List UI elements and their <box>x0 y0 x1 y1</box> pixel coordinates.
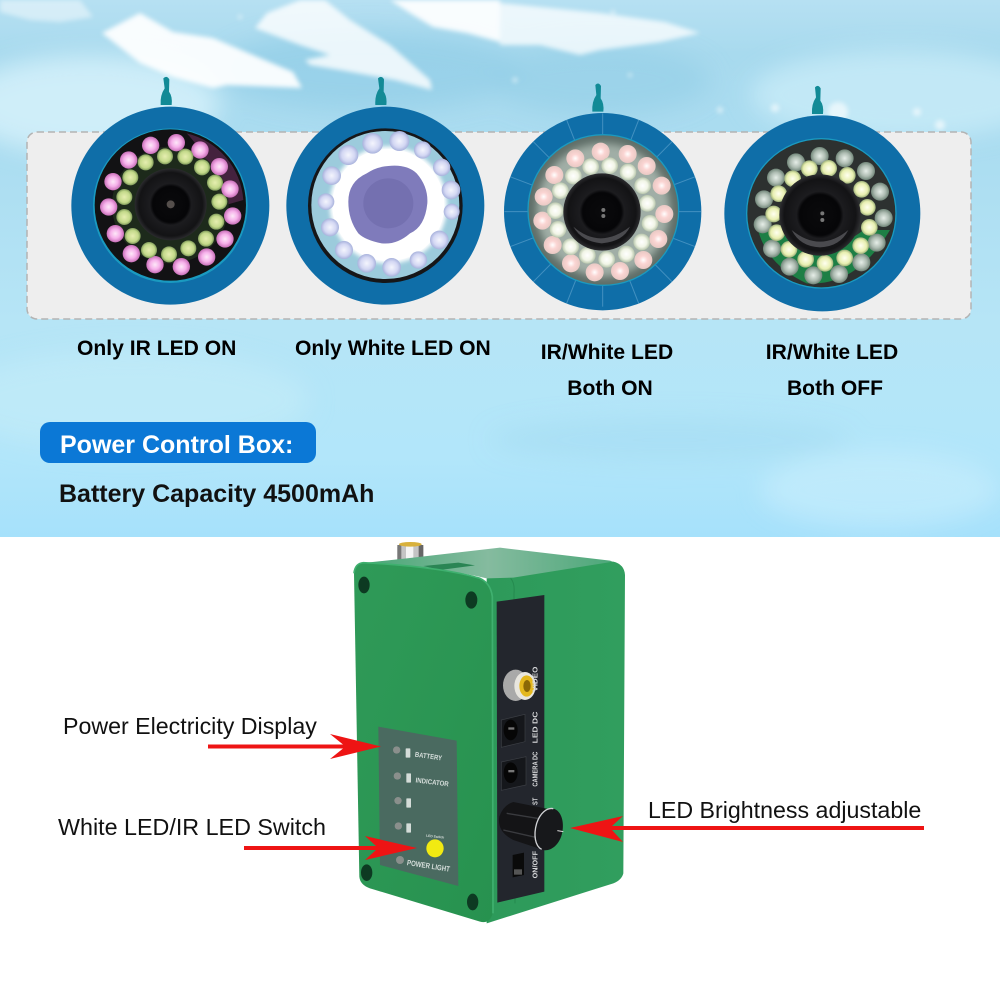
power control box product <box>354 542 625 923</box>
panel: dashed camera background <box>27 132 971 319</box>
indicator panel: POWER LIGHT <box>406 858 451 874</box>
label: both on: Both ON <box>567 377 653 400</box>
connector panel: VIDEO <box>532 666 539 692</box>
label: both off: IR/White LED <box>766 341 898 364</box>
label: only white LED on: Only White LED ON <box>295 337 491 360</box>
side face <box>487 562 625 923</box>
connector panel <box>497 595 544 903</box>
label: both off: Both OFF <box>787 377 883 400</box>
indicator panel: BATTERY <box>414 752 443 762</box>
camera: only IR LED on <box>71 77 269 305</box>
connector panel: LED DC <box>532 712 539 743</box>
connector panel: ON/OFF <box>532 850 539 878</box>
callout: power electricity display: Power Electricity Display <box>63 713 317 739</box>
callout: LED switch: White LED/IR LED Switch <box>58 814 326 840</box>
camera: both LEDs on <box>504 84 701 310</box>
indicator panel: LED Switch <box>426 834 445 840</box>
label: only IR LED on: Only IR LED ON <box>77 337 236 360</box>
front face <box>354 563 493 922</box>
camera: only white LED on <box>286 77 484 305</box>
camera: both LEDs off <box>724 86 920 311</box>
connector on top <box>397 542 423 563</box>
white lower section <box>0 537 1000 1000</box>
battery capacity text: Battery Capacity 4500mAh <box>59 480 374 508</box>
callout: power electricity display <box>63 713 381 759</box>
connector panel: ST <box>532 797 539 805</box>
top face <box>360 548 617 580</box>
indicator panel: INDICATOR <box>415 777 449 788</box>
water background <box>0 0 1000 537</box>
callout: brightness adjustable: LED Brightness adjustable <box>648 797 921 823</box>
brightness knob <box>499 802 563 850</box>
screw holes <box>358 577 478 910</box>
callout: LED switch <box>58 814 417 860</box>
heading pill: power control box: Power Control Box: <box>60 431 293 459</box>
label: both on: IR/White LED <box>541 341 673 364</box>
callout: brightness adjustable <box>570 797 924 842</box>
connector panel: CAMERA DC <box>532 752 539 787</box>
heading pill: power control box <box>40 422 316 463</box>
indicator panel <box>378 727 458 886</box>
